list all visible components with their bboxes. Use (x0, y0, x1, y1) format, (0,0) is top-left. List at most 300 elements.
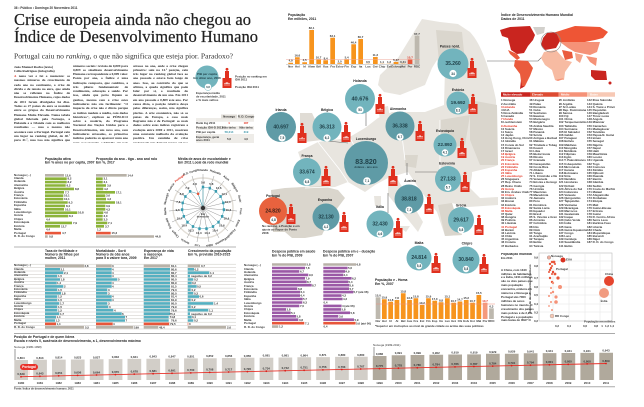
bars of the timeline (14, 357, 368, 380)
Portugal values: 0,787 (470, 362, 478, 366)
year labels: 1997 (339, 381, 345, 385)
text block: world population: Em 2011 (501, 256, 513, 260)
list: HDI ranking column 3: 100 Fiji (559, 114, 568, 118)
list: HDI ranking column 2: 81 Dominica (529, 203, 546, 207)
Portugal values: 0,664 (93, 370, 101, 374)
Portugal values: 0,678 (131, 369, 138, 373)
circle: Suécia: Países nórd. (440, 44, 460, 48)
top values: 0,856 (244, 354, 251, 358)
chart: life expectancy: 80,7 (171, 271, 177, 275)
row labels: lower charts: Luxemburgo (14, 301, 32, 305)
panel: orange bar chart bottom: RDC (488, 319, 495, 323)
row labels: purple charts: Eslovénia (244, 287, 258, 291)
panel: orange bar chart bottom: 6,3 (489, 304, 494, 308)
list: HDI ranking column 4: 183 Chade (587, 228, 601, 232)
circle: Irlanda: 40.697 (273, 124, 289, 130)
chart: child mortality: 3 (109, 305, 111, 309)
circle: Malta: 5,8 (417, 264, 421, 268)
circle: Alemanha: Alemanha (390, 107, 406, 111)
circle: Grécia: 29.617 (453, 218, 469, 224)
panel: orange bar chart bottom: Nor (376, 319, 381, 323)
panel: purple charts public spending: 4,4 (344, 273, 348, 277)
Portugal values: 0,751 (300, 366, 308, 370)
panel: orange bar chart bottom: 13,8 (407, 296, 413, 300)
top values: 0,929 (508, 350, 516, 354)
circle: Irlanda: 7 (301, 136, 303, 140)
panel: chart second indicator: 44,8 (155, 234, 161, 238)
row labels: purple charts: Bélgica (244, 277, 254, 281)
list: HDI ranking column 2: 61 Malásia (529, 139, 544, 143)
list: HDI ranking column 1: 19 Áustria (501, 155, 515, 159)
year labels: 2003 (452, 381, 459, 385)
row labels: upper charts (14, 173, 35, 238)
connector lines of the map (327, 52, 547, 213)
top values: 0,864 (300, 353, 308, 357)
chart: child mortality: 4 (112, 271, 114, 275)
chart: fertility rate: 2 (64, 284, 66, 288)
panel: comparison table: R. D. Congo (238, 114, 254, 118)
chart: fertility rate: 1,7 (60, 302, 64, 306)
list: HDI ranking column 3: 110 Mongólia (559, 146, 577, 150)
circle: Espanha (312, 198, 348, 232)
title (14, 10, 258, 46)
label Portugal (20, 364, 38, 376)
Portugal values: 0,809 (602, 359, 610, 363)
row labels: lower charts: Espanha (14, 294, 26, 298)
panel: radar chart years of schooling: Holanda (209, 168, 222, 176)
list: HDI ranking column 1: 38 Hungria (501, 215, 516, 219)
circle: Bélgica: Bélgica (321, 108, 333, 112)
year labels: 2007 (527, 381, 534, 385)
panel: population bar chart top (286, 13, 421, 68)
list: HDI ranking column 1: 33 Brunei (501, 199, 514, 203)
list: HDI ranking column 4: 166 Ruanda (587, 174, 603, 178)
row labels: upper charts: Chipre (14, 217, 23, 221)
circle: Chipre: 5,8 (464, 267, 468, 271)
circle: Chipre: 30.840 (458, 257, 474, 263)
list: HDI ranking column 4: 152 Tanzânia (587, 130, 605, 134)
panel: comparison table: Posição IDH-D 2011 (196, 126, 223, 130)
panel: purple charts public spending: 9,0 (309, 273, 313, 277)
text block: byline: João Manuel Rocha (texto) (14, 64, 53, 68)
panel: orange bar chart bottom: 10,7 (482, 299, 488, 303)
panel: chart schooling: 4,4 (46, 218, 50, 222)
panel: purple charts public spending: 5,6 (350, 283, 354, 287)
panel: population bar chart top: 46,4 (351, 40, 357, 44)
row labels: lower charts: Irlanda (14, 267, 23, 271)
top values: 0,899 (414, 351, 421, 355)
list: HDI ranking column 1: 16 Dinamarca (501, 146, 520, 150)
panel: purple charts public spending: 5,6 (348, 266, 352, 270)
panel: orange bar chart bottom: 15,5 (476, 291, 482, 295)
row labels: upper charts: Alemanha (14, 183, 28, 187)
circle: Suécia: 10 (470, 71, 474, 75)
panel: purple charts public spending: 8,7 (312, 283, 316, 287)
panel: purple charts public spending: 7,1 (305, 321, 309, 325)
panel: radar chart years of schooling: 7,8 (176, 200, 181, 204)
list: HDI ranking column 3: 102 Turquemenistão (559, 120, 587, 124)
row labels: upper charts: Portugal (14, 230, 26, 234)
panel: purple charts public spending: 3,8 (299, 318, 303, 322)
circle: Eslovénia: 6,7 (446, 186, 450, 190)
year labels: 1989 (188, 381, 194, 385)
chart: child mortality: 3 (108, 288, 110, 292)
circle: Chipre (452, 242, 488, 274)
panel: purple charts public spending: Em % do PIB, 2009 (272, 254, 302, 258)
panel: radar chart years of schooling: Eslov (234, 219, 241, 228)
list: HDI ranking column 1: 35 Eslováquia (501, 206, 520, 210)
row labels: purple charts (244, 263, 265, 328)
row labels: upper charts: Luxemburgo (14, 210, 32, 214)
panel: chart second indicator: 14,4 (128, 173, 134, 177)
list: HDI ranking column 1: 41 Portugal (501, 225, 517, 229)
top values: 0,847 (168, 355, 176, 359)
panel: purple charts public spending: 6,2 (352, 276, 356, 280)
list: HDI ranking column 1: 29 Grécia (501, 187, 514, 191)
list: HDI ranking column 3: 120 Namíbia (559, 177, 576, 181)
list: HDI ranking column 3: 98 Rep. Dominicana (559, 108, 586, 112)
circle: Espanha: 32.130 (318, 214, 334, 220)
list: HDI ranking column 2: 64 Líbia (529, 149, 540, 153)
panel: purple charts public spending: 6,7 (300, 270, 304, 274)
panel: radar chart years of schooling: Portugal (174, 173, 186, 183)
circle: Eslováquia: Eslováquia (436, 129, 454, 133)
text block: byline: Célia Rodrigues (infografia) (14, 69, 55, 73)
list: HDI ranking column 4: 177 Eritreia (587, 209, 603, 213)
circle: Suécia (438, 44, 476, 80)
circle: Luxemburgo: 7,1 (365, 179, 369, 183)
panel: orange bar chart bottom: Em %, 2007 (375, 282, 394, 286)
list: HDI ranking column 2: 70 Albânia (529, 168, 544, 172)
circle: Grécia (448, 204, 484, 235)
list: HDI ranking column 3: 126 Quirguistão (559, 196, 581, 200)
panel: population bar chart top: 0,5 (366, 60, 370, 64)
panel: purple charts public spending (272, 250, 375, 329)
list: HDI ranking column 4: 176 Guiné-Bissau (587, 206, 611, 210)
list: HDI ranking column 4: 184 Moçambique (587, 231, 610, 235)
row labels: upper charts: R. D. do Congo (14, 234, 35, 238)
circle: Áustria: 38.818 (401, 196, 417, 202)
panel: orange bar chart bottom: 17,0 (432, 297, 438, 301)
circle: Grécia: 29 (477, 228, 481, 232)
panel: radar chart years of schooling: 12,6 (216, 186, 222, 190)
panel: population bar chart top: 10,7 (316, 56, 322, 60)
circle: Espanha: Espanha (318, 198, 332, 202)
panel: chart schooling: População ativa (45, 157, 71, 161)
list: HDI ranking column 2: 71 Líbano (529, 171, 543, 175)
panel: comparison table: Noruega (223, 114, 235, 118)
panel: population bar chart top: 1,3 (387, 60, 391, 64)
world map (500, 12, 612, 89)
panel: population bar chart top: População (288, 13, 305, 17)
panel: chart second indicator: 3,6 (106, 194, 110, 198)
legend bar of development levels (501, 92, 615, 97)
chart: population growth: 0 (189, 322, 191, 326)
list: HDI ranking column 1: 42 Barém (501, 228, 514, 232)
panel: purple charts public spending: 7,8 (306, 266, 310, 270)
panel: radar chart years of schooling: Eslováq (164, 217, 172, 229)
scatter plot population vs HDI: 0,3 (534, 310, 538, 314)
panel: orange bar chart bottom: Áus (407, 318, 413, 323)
year labels (18, 381, 610, 385)
list: HDI ranking column 2 (529, 99, 557, 248)
list: HDI ranking column 4: 169 Sudão (587, 184, 601, 188)
list: HDI ranking column 3: 105 El Salvador (559, 130, 580, 134)
panel: chart second indicator: 7,1 (108, 221, 112, 225)
list: HDI ranking column 3: 108 Bolívia (559, 139, 574, 143)
chart: life expectancy: 81,5 (171, 284, 177, 288)
Portugal values: 0,681 (149, 369, 157, 373)
panel: purple charts public spending: 0,4 (324, 301, 328, 305)
Portugal values: 0,767 (357, 364, 365, 368)
panel: radar chart years of schooling: 7,9 (185, 186, 190, 190)
panel: orange bar chart bottom: População e - Homa (375, 278, 408, 282)
circle: Grécia: Grécia (456, 204, 466, 208)
title: Índice de Desenvolvimento Humano (14, 27, 258, 46)
circle: Alemanha: 36.338 (392, 124, 408, 130)
panel: chart second indicator: Em %, 2017 (96, 160, 115, 164)
panel: population bar chart top: Eslovq (391, 64, 401, 68)
panel: population bar chart top: 4,5 (303, 58, 307, 62)
row labels: lower charts: Eslovénia (14, 287, 28, 291)
panel: orange bar chart bottom: Fin (426, 319, 431, 323)
chart: population growth: 0,2 (192, 305, 196, 309)
chart: population growth: negativo de 0,2 (191, 312, 212, 316)
circle: Luxemburgo: 25 (391, 179, 395, 183)
panel: population bar chart top: 67,7 (414, 32, 420, 36)
panel: radar chart years of schooling (163, 157, 244, 248)
panel: circle legend GDP per capita: Esperança média (196, 91, 220, 95)
list: HDI ranking column 3: 140 Suazilândia (559, 240, 580, 244)
chart: population growth (188, 249, 231, 329)
chart: population growth: 0,2 (194, 319, 198, 323)
panel: purple charts public spending: 5,7 (350, 287, 354, 291)
year labels: 1992 (244, 381, 251, 385)
top values: 0,861 (263, 354, 270, 358)
circle: Luxemburgo: dólares · ano ano (354, 165, 378, 169)
panel: radar chart years of schooling: Malta (163, 207, 167, 215)
year labels: 2008 (546, 381, 553, 385)
panel: radar chart years of schooling: 10,4 (181, 223, 187, 227)
panel: population bar chart top: 11,3 (373, 53, 378, 57)
panel: orange bar chart bottom: 15,0 (375, 294, 381, 298)
chart: population growth: 0,6 (200, 295, 204, 299)
list: HDI ranking column 3: 101 China (559, 117, 572, 121)
chart: life expectancy: 80,0 (171, 302, 177, 306)
panel: radar chart years of schooling: 8,8 (180, 192, 184, 196)
panel: orange bar chart bottom: 7,8 (395, 296, 399, 300)
chart: child mortality: 4 (112, 298, 114, 302)
list: HDI ranking column 1: 4 EUA (501, 108, 510, 112)
chart: population growth: 1,4 (214, 302, 218, 306)
circle: Luxemburgo (344, 137, 398, 186)
panel: purple charts public spending: 4,9 (346, 270, 350, 274)
panel: comparison table: anos 2011 (196, 138, 210, 142)
year labels: 2009 (565, 381, 572, 385)
circle: Dinamarca (446, 88, 478, 114)
row labels: lower charts: Finlândia (14, 290, 27, 294)
panel: timeline Portugal vs Noruega: Noruega (1980-1998) (14, 345, 42, 349)
list: HDI ranking column 2: 73 Venezuela (529, 177, 547, 181)
list: HDI ranking column 3: 135 Gana (559, 225, 572, 229)
chart: population growth: 0,3 (194, 291, 198, 295)
Portugal values: 0,717 (225, 367, 233, 371)
year labels: 1995 (301, 381, 308, 385)
row labels: upper charts: Noruega (...) (14, 173, 31, 177)
chart: life expectancy: 80,9 (171, 281, 177, 285)
list: HDI ranking column 2: 67 Granada (529, 158, 545, 162)
chart: fertility rate: 2,8 (84, 264, 89, 268)
list: HDI ranking column 4: 174 Etiópia (587, 199, 602, 203)
row labels: purple charts: Malta (244, 318, 251, 322)
panel: chart second indicator: 3,9 (106, 204, 110, 208)
panel: timeline Portugal vs Noruega (14, 334, 615, 390)
Portugal values: 0,742 (282, 366, 289, 370)
circle: Malta: Malta (415, 241, 423, 245)
panel: chart second indicator: 3,9 (107, 184, 111, 188)
circle: Alemanha: 9 (419, 134, 421, 138)
scatter plot population vs HDI: Noruega (551, 254, 563, 258)
chart: child mortality: 4 (114, 308, 116, 312)
list: HDI ranking column 1: 28 Reino Unido (501, 184, 522, 188)
row labels: lower charts (14, 263, 35, 328)
scatter plot population vs HDI: 0,4 (534, 302, 538, 306)
scatter plot population vs HDI: 0,4 (567, 324, 571, 328)
row labels: purple charts: Luxemburgo (244, 301, 262, 305)
panel: chart second indicator: 18,1 (116, 200, 122, 204)
circle: Eslováquia: 35 (460, 151, 464, 155)
list: HDI ranking column 1: 11 Suíça (501, 130, 513, 134)
list: HDI ranking column 2: 65 Bielorrússia (529, 152, 550, 156)
panel: population bar chart top: Nor (288, 64, 294, 68)
circle: Portugal: No ranking, a Posição é em (262, 224, 300, 228)
panel: comparison table: Não tinha (222, 126, 236, 130)
top values: 0,861 (282, 354, 289, 358)
circle: França: 20 (324, 179, 328, 183)
scatter plot population vs HDI: 0,8 (534, 264, 538, 268)
panel: orange bar chart bottom: Mal (476, 319, 481, 323)
panel: purple charts public spending: 1,2 (279, 325, 283, 329)
year labels: 1983 (74, 381, 81, 385)
Portugal values: 0,651 (55, 371, 63, 375)
row labels: lower charts: Portugal (14, 321, 26, 325)
legend bar of development levels: Baixo (590, 93, 598, 97)
list: HDI ranking column 4: 158 Haiti (587, 149, 599, 153)
Portugal values: 0,775 (376, 364, 384, 368)
list: HDI ranking column 2: 78 Macedónia (529, 193, 548, 197)
Portugal trend line (21, 364, 606, 377)
panel: population bar chart top: Lux (365, 64, 371, 68)
panel: radar chart years of schooling: Fran (239, 208, 243, 215)
chart: fertility rate: mulher, 2011 (45, 256, 65, 260)
panel: population bar chart top: Ita (359, 64, 363, 68)
circle: Holanda (345, 79, 384, 114)
row labels: upper charts: França (14, 193, 23, 197)
circle: Dinamarca: Estónia (452, 88, 464, 92)
list: HDI ranking column 1: 26 Singapura (501, 177, 519, 181)
list: HDI ranking column 1: 22 Finlândia (501, 165, 518, 169)
panel: orange bar chart bottom: 10,7 (451, 299, 457, 303)
list: HDI ranking column 2: 91 Azerbaijão (529, 234, 548, 238)
panel: radar chart years of schooling: Em 2011 Local da rede mundial (178, 160, 228, 164)
Portugal values: 0,691 (168, 369, 176, 373)
legend bar of development levels: Muito elevado (503, 93, 523, 97)
chart: child mortality: 3 (112, 264, 114, 268)
chart: fertility rate: Taxa de fertilidade e (45, 249, 77, 253)
panel: radar chart years of schooling: 10,4 (177, 216, 183, 220)
list: HDI ranking column 2: 51 Cuba (529, 108, 541, 112)
panel: purple charts public spending: 5,9 (354, 318, 359, 322)
circle: Itália: 24 (396, 231, 400, 235)
panel: chart second indicator: 3,1 (104, 180, 108, 184)
year labels: 1998 (357, 381, 364, 385)
row labels: purple charts: R. D. do Congo (244, 324, 265, 328)
panel: orange bar chart bottom: Esl (420, 319, 424, 323)
chart: fertility rate: 2,1 (64, 271, 68, 275)
circle: Holanda: Holanda (353, 79, 367, 83)
scatter plot population vs HDI: 0,5 (534, 293, 538, 297)
Portugal values: 0,656 (74, 371, 82, 375)
panel: chart schooling: 10,1 (64, 197, 70, 201)
chart: fertility rate: 1,5 (58, 298, 62, 302)
top values: 0,827 (93, 355, 101, 359)
chart: child mortality: Número de óbs anos (96, 252, 130, 256)
chart: fertility rate: 1,5 (58, 308, 62, 312)
list: HDI ranking column 2: 89 Omã (529, 228, 540, 232)
list: HDI ranking column 4: 168 Gâmbia (587, 180, 603, 184)
circle: Irlanda: 7,5 (280, 136, 284, 140)
panel: radar chart years of schooling: Chipre (170, 229, 180, 239)
panel: population bar chart top: Est (387, 64, 391, 68)
panel: purple charts public spending: 0,4 (324, 325, 328, 329)
list: HDI ranking column 2: 94 Tunísia (529, 244, 543, 248)
panel: chart schooling: 7,7 (65, 190, 69, 194)
panel: purple charts public spending: 7,9 (306, 276, 310, 280)
list: HDI ranking column 4: 186 Níger (587, 237, 600, 241)
list: HDI ranking column 3 (559, 99, 587, 248)
row labels: purple charts: Holanda (244, 270, 255, 274)
Portugal values: 0,734 (263, 366, 270, 370)
Portugal values: 0,784 (489, 361, 497, 365)
list: HDI ranking column 3: 119 Síria (559, 174, 570, 178)
panel: comparison table: 5,6 (227, 137, 231, 141)
panel: purple charts public spending: 4,3 (343, 297, 347, 301)
row labels: upper charts: Holanda (14, 179, 25, 183)
panel: radar chart years of schooling: R.D. Congo (183, 168, 199, 177)
top values: 0,929 (489, 350, 497, 354)
panel: purple charts public spending: 5,8 (296, 314, 301, 318)
panel: radar chart years of schooling: 10,3 (196, 231, 202, 235)
circle: Portugal (259, 194, 300, 235)
panel: chart schooling: 12,7 (61, 224, 67, 228)
chart: population growth: 0,2 (194, 278, 198, 282)
list: HDI ranking column 4 (587, 99, 615, 244)
list: HDI ranking column 3: 137 Congo (559, 231, 573, 235)
row labels: lower charts: Alemanha (14, 273, 28, 277)
circle: Portugal: ajuste ao Rapor do Ponto (262, 228, 297, 232)
row labels: upper charts: Itália (14, 207, 21, 211)
panel: chart schooling: 10,1 (65, 207, 71, 211)
year labels: 1987 (150, 381, 157, 385)
list: HDI ranking column 4: 182 Libéria (587, 225, 602, 229)
panel: orange bar chart bottom: 8,8 (439, 298, 443, 302)
list: HDI ranking column 2: 84 Brasil (529, 212, 541, 216)
panel: radar chart years of schooling: 5,8 (209, 182, 214, 186)
panel: comparison table (196, 114, 254, 143)
list: HDI ranking column 1: 17 Israel (501, 149, 513, 153)
chart: population growth: 0,5 (197, 284, 201, 288)
top values: 0,833 (112, 355, 119, 359)
